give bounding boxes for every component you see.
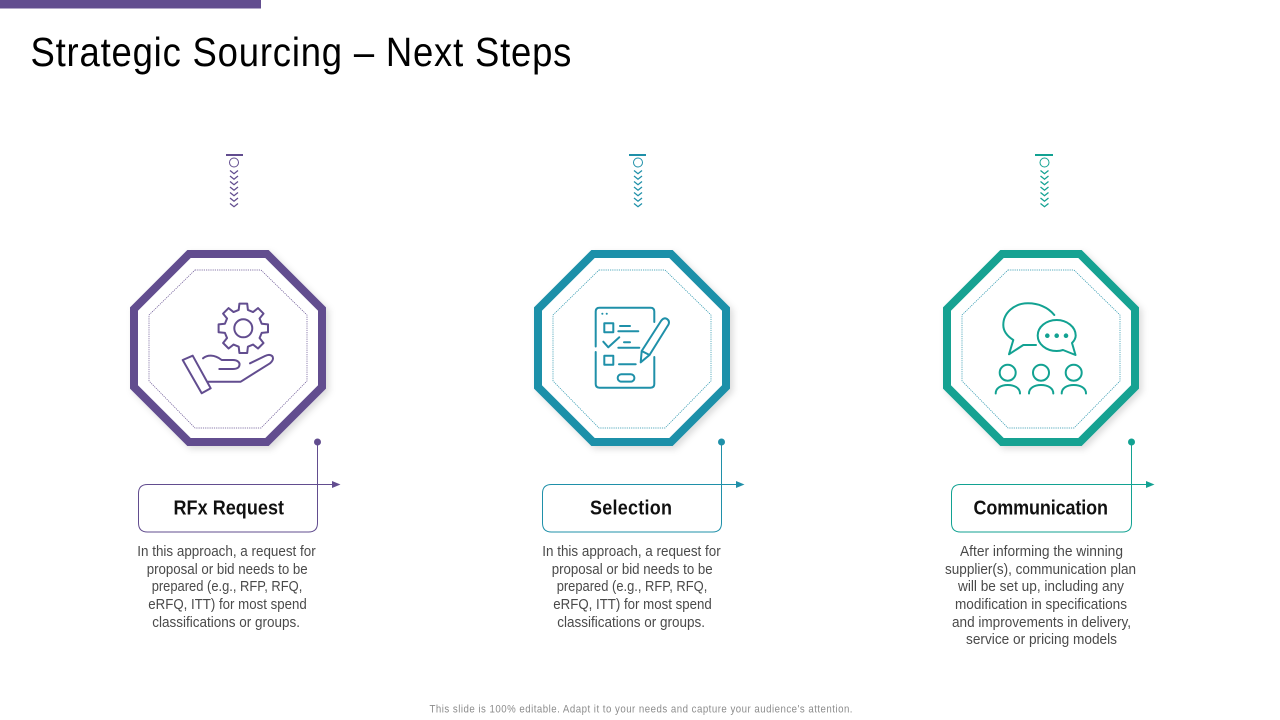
description: [137, 543, 316, 631]
dotted inner octagon: [553, 270, 711, 428]
icon: checklist with pen: [596, 308, 669, 388]
label: Selection: [590, 498, 672, 520]
description: eRFQ, ITT) for most spend: [553, 596, 712, 613]
octagon ring: [134, 254, 322, 442]
description: [945, 543, 1136, 648]
label box: [138, 484, 318, 532]
octagon ring: [538, 254, 726, 442]
label: RFx Request: [174, 498, 285, 520]
connector decoration: [226, 155, 243, 207]
footer note: This slide is 100% editable. Adapt it to your needs and capture your audience's attention.: [430, 704, 853, 716]
callout arrow: [1128, 438, 1154, 488]
callout arrow: [314, 438, 340, 488]
panel: Selection: [538, 155, 744, 631]
description: [542, 543, 721, 631]
description: classifications or groups.: [152, 614, 300, 631]
description: modification in specifications: [955, 596, 1127, 613]
description: In this approach, a request for: [137, 543, 316, 560]
label: Communication: [974, 498, 1108, 520]
description: proposal or bid needs to be: [147, 561, 308, 578]
description: and improvements in delivery,: [952, 614, 1131, 631]
dotted inner octagon: [962, 270, 1120, 428]
octagon ring: [947, 254, 1135, 442]
description: prepared (e.g., RFP, RFQ,: [152, 578, 302, 595]
description: will be set up, including any: [957, 578, 1124, 595]
callout arrow: [718, 438, 744, 488]
description: In this approach, a request for: [542, 543, 721, 560]
icon: hand with gear: [183, 304, 273, 393]
dotted inner octagon: [149, 270, 307, 428]
description: After informing the winning: [960, 543, 1123, 560]
description: prepared (e.g., RFP, RFQ,: [557, 578, 707, 595]
description: classifications or groups.: [557, 614, 705, 631]
title: Strategic Sourcing – Next Steps: [30, 30, 571, 75]
icon: people with speech bubbles: [996, 303, 1086, 394]
label box: [542, 484, 722, 532]
connector decoration: [1035, 155, 1053, 207]
connector decoration: [629, 155, 646, 207]
description: service or pricing models: [966, 631, 1117, 648]
description: supplier(s), communication plan: [945, 561, 1136, 578]
label box: [952, 484, 1132, 532]
description: eRFQ, ITT) for most spend: [148, 596, 307, 613]
panel: Communication: [945, 155, 1154, 648]
panel: RFx Request: [134, 155, 340, 631]
accent bar: [0, 0, 261, 8]
description: proposal or bid needs to be: [552, 561, 713, 578]
